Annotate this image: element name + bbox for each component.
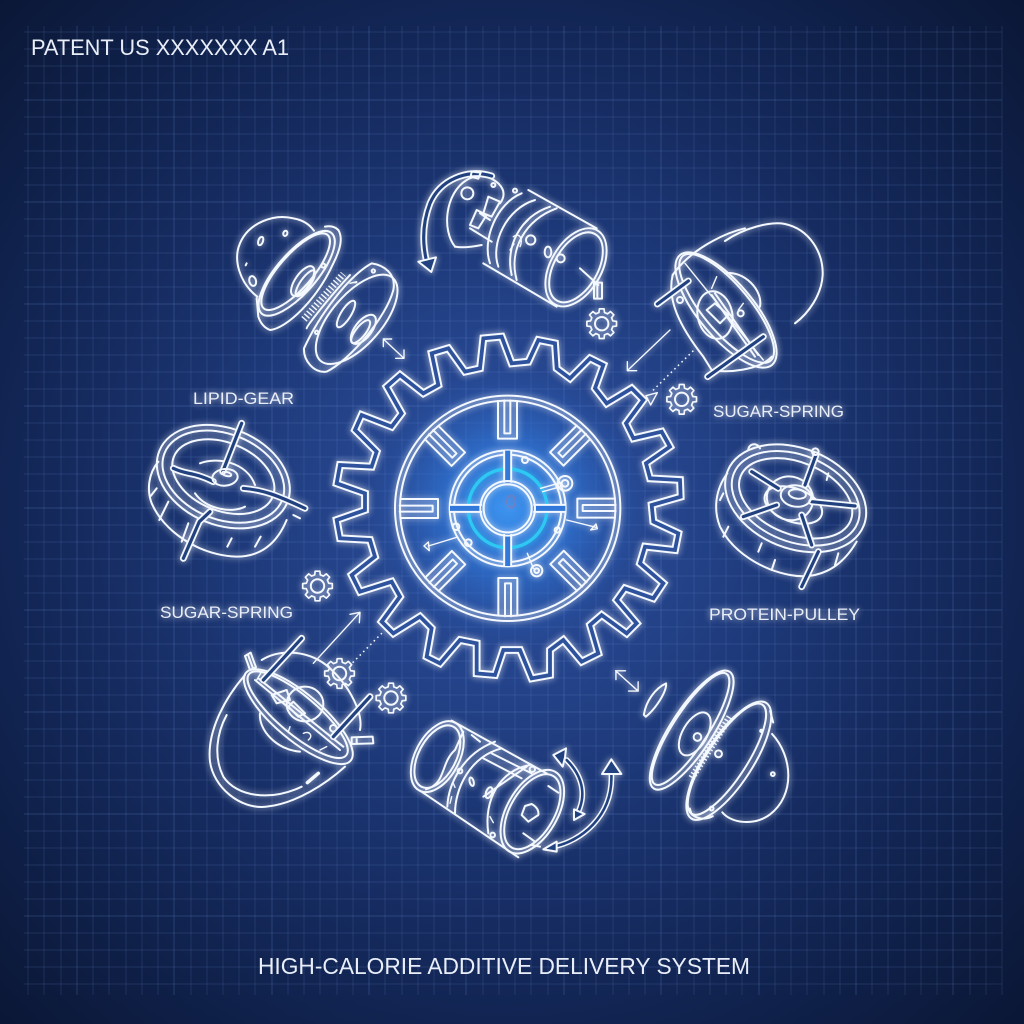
arrow: from capsule to gear (627, 330, 670, 371)
arrow: double-headed (383, 339, 404, 358)
small gear (667, 384, 696, 414)
dotted line (353, 632, 383, 663)
label: lipid gear: LIPID-GEAR (193, 389, 294, 408)
arrow: from lower capsule to gear (313, 612, 360, 663)
cyan ring (468, 469, 547, 548)
component: bottom cylinder with arrows (400, 712, 621, 864)
hub rings (450, 450, 566, 566)
gear outline (337, 337, 681, 678)
red smudge (507, 496, 515, 508)
central gear (337, 337, 681, 678)
label: sugar spring left: SUGAR-SPRING (160, 603, 293, 622)
component: left wheel (141, 406, 305, 558)
component: upper right egg capsule (657, 223, 823, 382)
small gear (376, 683, 406, 713)
label: protein pulley: PROTEIN-PULLEY (709, 605, 860, 624)
component: dome and disc with spring (237, 217, 412, 377)
component: lower left egg capsule (210, 638, 373, 807)
dotted arrow (646, 351, 693, 405)
component: lower right pod with spring (636, 660, 788, 831)
machine illustration (141, 172, 882, 864)
small gear (325, 659, 354, 688)
patent number heading: PATENT US XXXXXXX A1 (31, 35, 289, 60)
small gear (303, 571, 332, 601)
label: sugar spring right: SUGAR-SPRING (713, 402, 844, 421)
component: right wheel (709, 425, 882, 587)
small gear (587, 309, 616, 338)
core glow (368, 367, 648, 647)
wheel rim (395, 396, 620, 621)
arrow: double-headed lower right (616, 671, 638, 691)
wheel slots (400, 400, 616, 616)
hub details: small gears and arrows (424, 457, 597, 576)
component: top cylinder with curved arrow (418, 172, 619, 317)
bottom title: HIGH-CALORIE ADDITIVE DELIVERY SYSTEM (258, 953, 750, 979)
